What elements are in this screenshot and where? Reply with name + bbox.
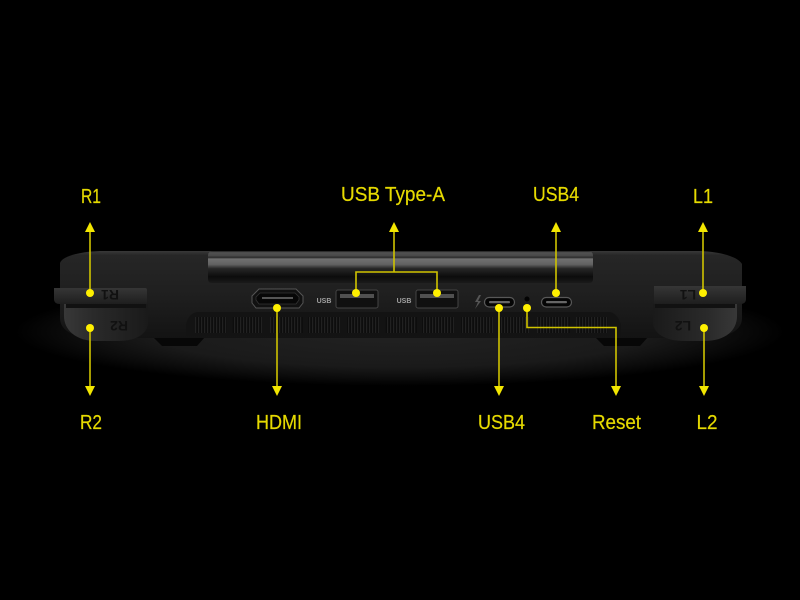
Thunderbolt mark (475, 295, 481, 309)
callout: USB4 upper: USB4 (533, 184, 579, 206)
reset pinhole (524, 296, 530, 302)
callout: R2: R2 (80, 412, 102, 434)
callout: L2 (696, 324, 718, 434)
vent strip (186, 312, 621, 336)
callout: HDMI: HDMI (256, 412, 302, 434)
callout: L1 (693, 186, 713, 297)
USB-A port right (397, 290, 458, 308)
callout: Reset (523, 304, 641, 434)
callout: R1 (81, 186, 101, 297)
USB4 port left (484, 298, 514, 307)
callout: R1: R1 (81, 186, 101, 208)
chassis (60, 251, 742, 338)
L2 trigger: L2 (675, 318, 691, 334)
callout: USB Type-A: USB Type-A (341, 184, 446, 206)
L1 bumper (654, 286, 746, 304)
R1 bumper: R1 (101, 287, 119, 303)
L2 trigger (653, 304, 737, 341)
L1 bumper: L1 (680, 287, 696, 303)
USB-A port left: USB (317, 298, 331, 305)
infographic: device rear ports diagram (54, 186, 746, 430)
callout: L2: L2 (696, 412, 718, 434)
callout: USB4 lower: USB4 (478, 412, 525, 434)
HDMI port (252, 289, 303, 308)
device body (54, 251, 746, 346)
feet (153, 337, 205, 346)
callout: HDMI (256, 304, 302, 434)
R2 trigger (64, 304, 148, 341)
callout: USB Type-A (341, 184, 446, 297)
device glow (54, 324, 746, 380)
callout: USB4 lower (478, 304, 525, 434)
callout: USB4 upper (533, 184, 579, 297)
USB4 port right (542, 298, 572, 307)
hinge bar (208, 251, 593, 283)
R1 bumper (54, 287, 147, 304)
R2 trigger: R2 (110, 318, 128, 334)
callout: Reset: Reset (592, 412, 641, 434)
callout: R2 (80, 324, 102, 434)
USB-A port right: USB (397, 298, 411, 305)
USB-A port left (317, 290, 378, 308)
callout: L1: L1 (693, 186, 713, 208)
